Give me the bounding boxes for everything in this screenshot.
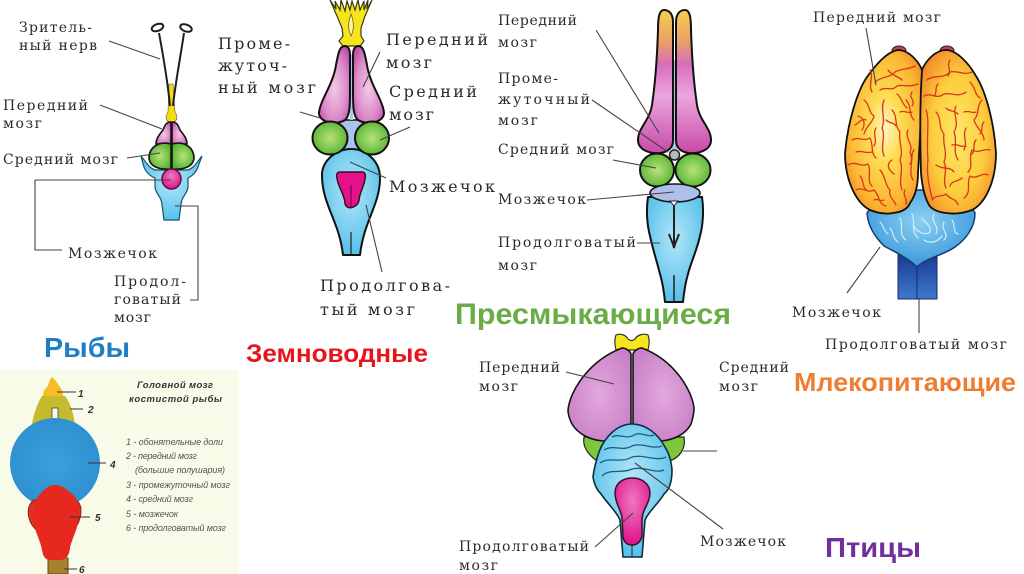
labels: bird: Средний (719, 360, 789, 376)
labels: fish: ный нерв (19, 38, 97, 54)
labels: bird: Мозжечок (700, 534, 786, 550)
heading: Рыбы: Рыбы (44, 332, 130, 363)
inset legend: 3 - промежуточный мозг (126, 480, 231, 490)
labels: bird: мозг (479, 379, 518, 395)
labels: fish: мозг (114, 310, 151, 326)
labels: reptile: мозг (498, 35, 537, 51)
labels: fish: Зритель- (19, 20, 92, 36)
labels: bird: Передний (479, 360, 560, 376)
labels: reptile: мозг (498, 113, 538, 129)
inset legend: 1 - обонятельные доли (126, 437, 223, 447)
labels: fish (3, 20, 186, 326)
labels: reptile: мозг (498, 258, 537, 274)
labels: amphibian: жуточ- (218, 56, 287, 75)
inset legend: 5 - мозжечок (126, 509, 179, 519)
inset title: Головной мозг (137, 380, 213, 391)
labels: amphibian: Передний (386, 30, 488, 49)
inset legend: (большие полушария) (135, 465, 225, 475)
labels: amphibian: Продолгова- (320, 276, 450, 295)
labels: mammal: Мозжечок (792, 305, 881, 321)
labels: reptile: Мозжечок (498, 192, 586, 208)
panel: amphibian brain (218, 0, 495, 368)
leader lines: fish (35, 41, 198, 300)
heading: Земноводные: Земноводные (246, 340, 428, 368)
inset number markers: 2 (87, 405, 94, 416)
leader lines: amphibian (300, 52, 410, 272)
diagram: fish brain (141, 22, 202, 220)
labels: amphibian (218, 30, 495, 319)
heading: Птицы: Птицы (825, 532, 921, 563)
diagram: mammal brain (845, 46, 996, 299)
labels: amphibian: ный мозг (218, 78, 316, 97)
diagram: amphibian brain (312, 0, 389, 255)
labels: reptile: Продолговатый (498, 235, 636, 251)
labels: mammal: Передний мозг (813, 10, 941, 26)
diagram: bird brain (568, 334, 694, 557)
inset legend: 4 - средний мозг (126, 494, 194, 504)
leader lines: reptile (587, 30, 674, 243)
panel: bony fish brain inset (0, 370, 239, 574)
diagram: reptile brain (638, 10, 711, 302)
labels: mammal (792, 10, 1007, 353)
labels: amphibian: Средний (389, 82, 477, 101)
labels: fish: говатый (114, 292, 181, 308)
inset number markers (57, 389, 116, 574)
labels: reptile: жуточный (498, 92, 590, 108)
labels: reptile (498, 13, 636, 274)
inset title (129, 380, 222, 405)
heading: Пресмыкающиеся: Пресмыкающиеся (455, 298, 731, 331)
panel: mammal brain (792, 10, 1016, 397)
labels: fish: Продол- (114, 274, 186, 290)
labels: bird: мозг (719, 379, 758, 395)
inset number markers: 4 (109, 460, 116, 471)
panel: fish brain (3, 20, 202, 363)
labels: amphibian: мозг (389, 105, 434, 124)
labels: fish: Мозжечок (68, 246, 157, 262)
labels: fish: мозг (3, 116, 42, 132)
inset legend (125, 437, 231, 533)
labels: fish: Передний (3, 98, 88, 114)
labels: amphibian: Мозжечок (389, 177, 495, 196)
labels: amphibian: мозг (386, 53, 432, 72)
labels: amphibian: Проме- (218, 34, 290, 53)
labels: bird: мозг (459, 558, 498, 574)
labels: bird: Продолговатый (459, 539, 589, 555)
labels: reptile: Передний (498, 13, 577, 29)
labels: reptile: Средний мозг (498, 142, 614, 158)
inset number markers: 5 (95, 513, 101, 524)
panel: bird brain (459, 334, 921, 574)
inset number markers: 1 (78, 389, 84, 400)
inset legend: 2 - передний мозг (125, 451, 198, 461)
labels: bird (459, 360, 789, 574)
labels: amphibian: тый мозг (320, 300, 415, 319)
labels: mammal: Продолговатый мозг (825, 337, 1007, 353)
inset legend: 6 - продолговатый мозг (126, 523, 227, 533)
inset title: костистой рыбы (129, 394, 222, 405)
leader lines: bird (566, 372, 723, 547)
labels: fish: Средний мозг (3, 152, 118, 168)
inset background (0, 370, 239, 574)
heading: Млекопитающие: Млекопитающие (794, 367, 1016, 397)
panel: reptile brain (455, 10, 731, 331)
leader lines: mammal (847, 28, 919, 333)
diagram: bony fish brain (10, 377, 100, 574)
labels: reptile: Проме- (498, 71, 558, 87)
